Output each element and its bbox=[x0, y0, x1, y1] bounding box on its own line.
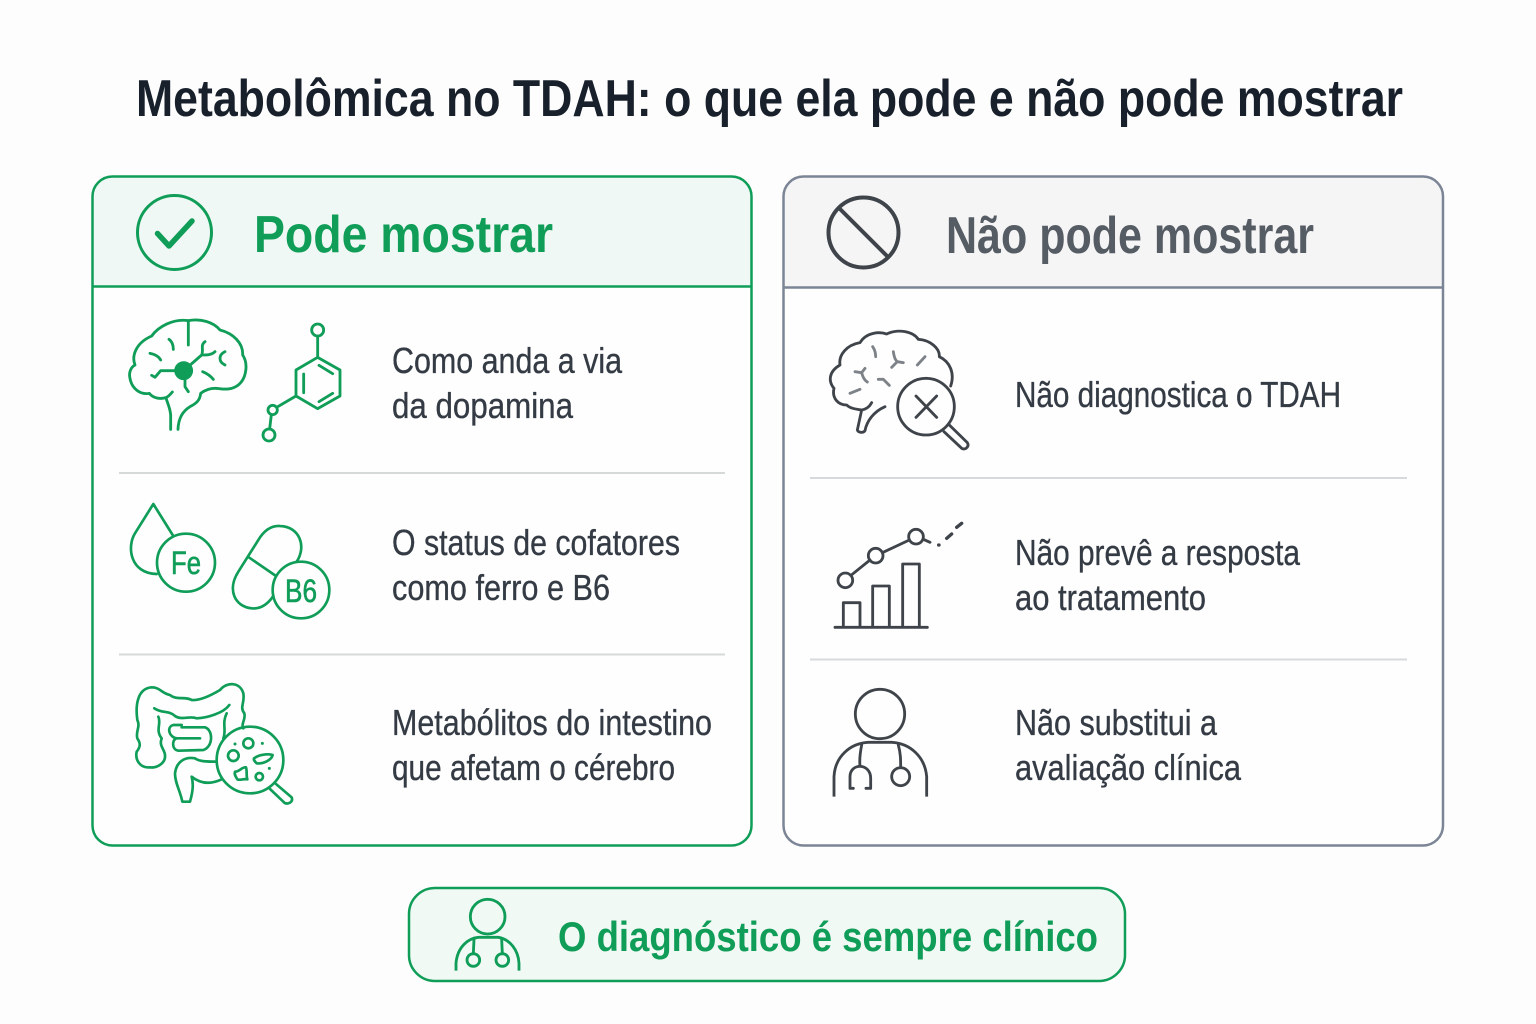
icon: brain with magnifier and x bbox=[830, 331, 968, 449]
panel header: nao pode mostrar bbox=[784, 176, 1443, 287]
callout: diagnostico clinico bbox=[409, 888, 1125, 981]
text: nao substitui: Não substitui a bbox=[1015, 702, 1218, 743]
text: nao substitui bbox=[1015, 702, 1242, 788]
panel header: pode mostrar bbox=[92, 176, 752, 286]
callout text: O diagnóstico é sempre clínico bbox=[558, 913, 1098, 960]
icon: iron drop and B6 capsule bbox=[131, 504, 329, 618]
icon: brain with dopamine molecule bbox=[130, 320, 340, 441]
text: cofatores bbox=[392, 522, 680, 608]
text: cofatores: O status de cofatores bbox=[392, 522, 680, 563]
icon: intestine with magnifier bbox=[136, 684, 292, 803]
icon: bar chart with trend line bbox=[835, 523, 962, 627]
text: nao substitui: avaliação clínica bbox=[1015, 747, 1242, 788]
text: nao preve: Não prevê a resposta bbox=[1015, 532, 1301, 573]
text: via da dopamina: da dopamina bbox=[392, 385, 574, 426]
panel: nao pode mostrar bbox=[784, 176, 1443, 846]
text: nao preve: ao tratamento bbox=[1015, 577, 1206, 618]
text: metabolitos do intestino: Metabólitos do intestino bbox=[392, 702, 712, 743]
text: via da dopamina: Como anda a via bbox=[392, 340, 623, 381]
text: nao diagnostica: Não diagnostica o TDAH bbox=[1015, 374, 1341, 415]
icon: doctor with stethoscope bbox=[834, 689, 927, 797]
icon: doctor bbox=[456, 899, 519, 971]
text: metabolitos do intestino: que afetam o cérebro bbox=[392, 747, 675, 788]
text: nao preve bbox=[1015, 532, 1301, 618]
text: metabolitos do intestino bbox=[392, 702, 712, 788]
panel: pode mostrar bbox=[92, 176, 752, 846]
heading: pode mostrar: Pode mostrar bbox=[254, 206, 553, 264]
icon: iron drop and B6 capsule: Fe bbox=[171, 545, 201, 581]
icon: iron drop and B6 capsule: B6 bbox=[285, 573, 317, 609]
icon: check circle bbox=[138, 196, 212, 270]
text: via da dopamina bbox=[392, 340, 623, 426]
icon: prohibited sign bbox=[828, 198, 898, 268]
text: cofatores: como ferro e B6 bbox=[392, 567, 610, 608]
heading: nao pode mostrar: Não pode mostrar bbox=[946, 207, 1314, 265]
